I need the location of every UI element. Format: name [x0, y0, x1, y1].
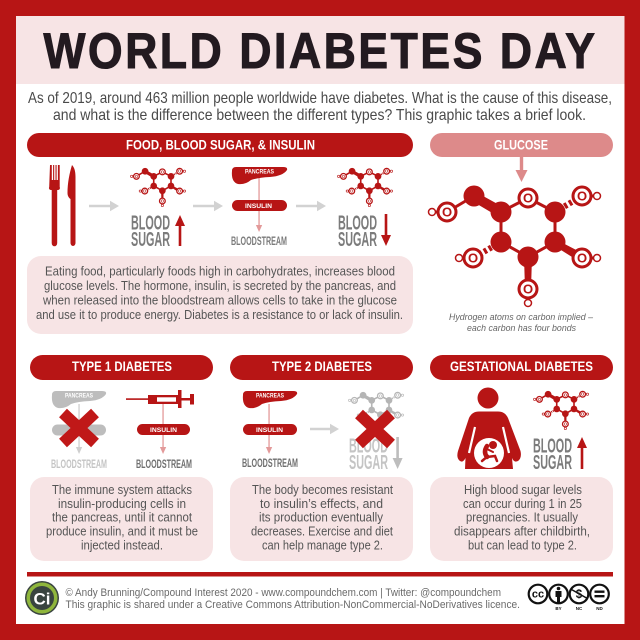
icon: pancreas: PANCREAS	[245, 170, 274, 176]
arrow: insulin to blood sugar	[310, 424, 339, 434]
credits text: This graphic is shared under a Creative Commons Attribution-NonCommercial-NoDerivatives licence.	[66, 599, 520, 611]
icon: glucose molecule: O	[178, 189, 182, 194]
insulin pill: INSULIN	[245, 204, 272, 210]
icon: fork and knife	[49, 165, 76, 246]
icon: glucose molecule, inactive: O	[379, 393, 383, 398]
icon: glucose molecule: O	[564, 392, 568, 397]
panel: gestational diabetes	[430, 355, 613, 561]
label: blood sugar up: BLOOD	[131, 212, 170, 234]
text block: gestational explanation: pregnancies. It usually	[466, 511, 579, 525]
icon: glucose molecule after insulin: O	[342, 174, 346, 179]
text block: gestational explanation: High blood sugar levels	[464, 483, 582, 497]
icon: glucose molecule: O	[546, 412, 550, 417]
icon: glucose molecule, inactive: O	[396, 413, 400, 418]
pathway: pancreas releases insulin into bloodstream	[231, 167, 287, 248]
label: blood sugar, inactive	[349, 436, 388, 474]
arrow: insulin to bloodstream	[266, 404, 272, 454]
caption: glucose note: each carbon has four bonds	[467, 323, 576, 334]
arrow: insulin to lower blood sugar	[296, 201, 326, 211]
heading: gestational diabetes	[430, 355, 613, 380]
panel: type 2 diabetes	[230, 355, 413, 561]
intro text	[28, 90, 612, 124]
label: blood sugar up	[131, 212, 170, 251]
arrow: food to blood sugar	[89, 201, 119, 211]
icon: syringe	[126, 390, 194, 408]
icon: glucose molecule, inactive: O	[396, 393, 400, 398]
icon: pancreas, inactive: PANCREAS	[65, 394, 93, 400]
label: blood sugar, inactive: BLOOD	[349, 436, 388, 458]
heading: food, blood sugar and insulin	[27, 133, 413, 157]
text block: type 1 explanation: injected instead.	[81, 538, 163, 552]
text block: food and insulin explanation: and use it to produce energy. Diabetes is a resistance to or lack of insulin.	[36, 308, 403, 322]
chart: glucose molecule structure	[428, 186, 600, 306]
label: bloodstream: BLOODSTREAM	[231, 234, 287, 248]
icon: glucose molecule: O	[135, 174, 139, 179]
icon: red cross	[359, 414, 391, 444]
icon: baby	[482, 441, 497, 461]
icon: glucose molecule after insulin: O	[350, 189, 354, 194]
icon: glucose molecule, inactive: O	[353, 398, 357, 403]
text block: type 2 explanation: decreases. Exercise and diet	[251, 525, 393, 539]
arrow: glucose to molecule	[516, 157, 528, 182]
icon: glucose molecule, inactive	[349, 392, 404, 431]
heading: type 2 diabetes	[230, 355, 413, 380]
chart: glucose molecule structure: O	[577, 188, 587, 204]
label: blood sugar up: BLOOD	[533, 436, 572, 458]
chart: glucose molecule structure: O	[523, 190, 533, 206]
text block: type 2 explanation: The body becomes resistant	[252, 483, 393, 497]
icon: glucose molecule: O	[161, 169, 165, 174]
insulin pill: INSULIN	[256, 428, 283, 434]
text block: type 1 explanation	[30, 477, 213, 561]
icon: glucose molecule: O	[161, 198, 165, 203]
footer	[25, 572, 613, 615]
text block: type 1 explanation: produce insulin, and it must be	[46, 525, 198, 539]
heading: type 1 diabetes	[30, 355, 213, 380]
text block: type 2 explanation: its production eventually	[259, 511, 384, 525]
icon: glucose molecule after insulin: O	[385, 189, 389, 194]
title band	[16, 16, 624, 84]
text block: type 2 explanation: to insulin’s effects, and	[260, 497, 383, 511]
text block: food and insulin explanation: when released into the bloodstream allows cells to take in the glucose	[42, 294, 397, 308]
label: bloodstream: BLOODSTREAM	[242, 456, 298, 470]
arrow: failed insulin pathway	[76, 404, 82, 454]
text block: food and insulin explanation	[27, 256, 413, 334]
icon: creative commons badges: $	[576, 589, 583, 601]
panel: glucose	[428, 133, 613, 334]
label: blood sugar down: SUGAR	[338, 229, 377, 251]
icon: glucose molecule: O	[564, 421, 568, 426]
icon: compound interest logo	[25, 581, 59, 615]
arrow: blood sugar down, inactive	[393, 437, 403, 469]
text block: gestational explanation: can occur during 1 in 25	[463, 497, 582, 511]
chart: glucose molecule structure: O	[577, 250, 587, 266]
icon: glucose molecule after insulin: O	[368, 198, 372, 203]
icon: creative commons badges: NC	[576, 606, 583, 611]
caption: glucose note: Hydrogen atoms on carbon implied –	[449, 312, 594, 323]
icon: glucose molecule after insulin: O	[385, 169, 389, 174]
text block: type 2 explanation	[230, 477, 413, 561]
icon: glucose molecule	[131, 168, 186, 207]
text block: food and insulin explanation: glucose levels. The hormone, insulin, is secreted by the pancreas, and	[44, 279, 396, 293]
chart: glucose molecule structure: O	[442, 204, 452, 220]
label: blood sugar down: BLOOD	[338, 212, 377, 234]
text block: gestational explanation: but can lead to type 2.	[468, 538, 577, 552]
insulin pill	[243, 424, 297, 435]
icon: creative commons badges	[529, 585, 609, 611]
heading: type 1 diabetes: TYPE 1 DIABETES	[72, 358, 172, 374]
icon: glucose molecule, inactive: O	[379, 422, 383, 427]
heading: glucose	[430, 133, 613, 157]
insulin pill	[137, 424, 190, 435]
text block: type 1 explanation: insulin-producing cells in	[58, 497, 186, 511]
panel: type 1 diabetes	[30, 355, 213, 561]
icon: glucose molecule: O	[538, 397, 542, 402]
icon: pregnant woman	[457, 388, 521, 469]
icon: red cross	[63, 413, 95, 443]
icon: creative commons badges: ND	[596, 606, 603, 611]
chart: glucose molecule structure: O	[523, 282, 533, 296]
credits text: © Andy Brunning/Compound Interest 2020 - www.compoundchem.com | Twitter: @compoundchem	[66, 587, 501, 599]
heading: type 2 diabetes: TYPE 2 DIABETES	[272, 358, 372, 374]
icon: pancreas: PANCREAS	[256, 394, 284, 400]
chart: glucose molecule structure: O	[468, 250, 478, 266]
label: blood sugar up: SUGAR	[533, 452, 572, 474]
icon: glucose molecule: O	[178, 169, 182, 174]
icon: glucose molecule: O	[581, 392, 585, 397]
label: bloodstream: BLOODSTREAM	[136, 457, 192, 471]
heading: food, blood sugar and insulin: FOOD, BLOOD SUGAR, & INSULIN	[126, 136, 315, 152]
icon: glucose molecule after insulin: O	[368, 169, 372, 174]
heading: glucose: GLUCOSE	[494, 136, 548, 152]
arrow: injected insulin to bloodstream	[160, 403, 166, 454]
insulin pill, inactive	[52, 424, 106, 436]
text block: type 1 explanation: The immune system attacks	[52, 483, 192, 497]
icon: glucose molecule after insulin	[338, 168, 393, 207]
arrow: blood sugar up	[577, 437, 587, 469]
icon: creative commons badges: BY	[555, 606, 562, 611]
label: blood sugar up: SUGAR	[131, 229, 170, 251]
credits text	[66, 587, 520, 611]
caption: glucose note	[449, 312, 594, 334]
text block: food and insulin explanation: Eating food, particularly foods high in carbohydrates, increases blood	[45, 264, 395, 278]
label: bloodstream, inactive: BLOODSTREAM	[51, 457, 107, 471]
icon: compound interest logo: Ci	[34, 590, 50, 608]
icon: creative commons badges: cc	[532, 588, 544, 600]
icon: glucose molecule: O	[581, 412, 585, 417]
heading: gestational diabetes: GESTATIONAL DIABETES	[450, 358, 593, 374]
icon: glucose molecule	[534, 391, 589, 430]
arrow: blood sugar up	[175, 215, 185, 246]
icon: glucose molecule: O	[143, 189, 147, 194]
arrow: insulin to bloodstream	[256, 178, 262, 232]
label: blood sugar, inactive: SUGAR	[349, 452, 388, 474]
label: blood sugar down	[338, 212, 377, 251]
arrow: blood sugar to pancreas	[193, 201, 223, 211]
insulin pill: INSULIN	[150, 428, 177, 434]
label: blood sugar up	[533, 436, 572, 474]
text block: gestational explanation: disappears after childbirth,	[454, 525, 590, 539]
icon: pancreas, inactive	[52, 391, 106, 408]
text block: gestational explanation	[430, 477, 613, 561]
arrow: blood sugar down	[381, 214, 391, 246]
panel: food, blood sugar and insulin	[27, 133, 413, 334]
icon: glucose molecule, inactive: O	[361, 413, 365, 418]
icon: pancreas	[243, 391, 297, 408]
text block: type 2 explanation: can help manage type 2.	[262, 538, 383, 552]
text block: type 1 explanation: the pancreas, until it cannot	[52, 511, 192, 525]
